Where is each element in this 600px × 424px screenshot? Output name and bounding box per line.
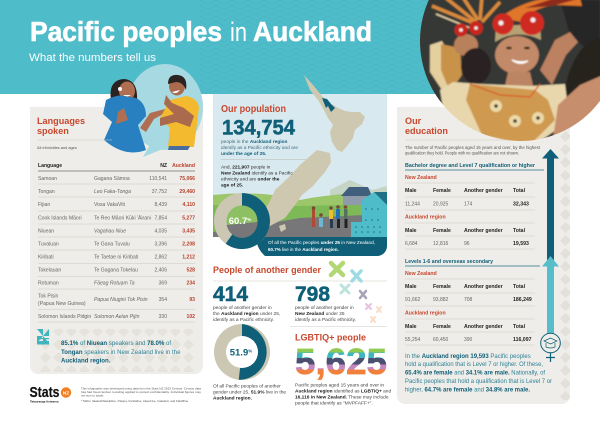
- section: Bachelor degree: 6,684: [405, 241, 418, 247]
- text: Auckland under 25: identify as a Pacific ethnicity and are: [221, 145, 298, 151]
- donut chart: 51.9%: [214, 324, 270, 380]
- summary text: higher, 64.7% are female and 34.8% are male.: [405, 388, 530, 394]
- callout pill: Of all the Pacific peoples under 25 in New Zealand,: [268, 240, 375, 245]
- donut chart: 51.9%: 51.9: [230, 348, 248, 358]
- stat: 414: 414: [213, 283, 248, 306]
- text: Auckland under 25: [221, 139, 298, 157]
- section: Bachelor degree: Total: [513, 228, 526, 234]
- table: languages: Niuean: [38, 228, 54, 234]
- table: languages: Te Gana Tuvalu: [94, 242, 130, 248]
- summary text: 65.4% are female and 34.1% are male. Nationally, of: [405, 370, 545, 376]
- table: languages: 369: [159, 280, 167, 286]
- table: languages: 4,110: [183, 202, 195, 208]
- section: Levels 1-6: 708: [464, 297, 473, 303]
- section: Levels 1-6: Another gender: [464, 324, 503, 330]
- section: Levels 1-6: Total: [513, 284, 526, 290]
- table: languages: Tokelauan: [38, 268, 61, 274]
- logo: Stats NZ: Stats: [30, 385, 60, 401]
- table: languages: Te Reo Māori Kūki 'Āirani: [94, 214, 151, 222]
- text: New Zealand under 25: New Zealand identify as a Pacific: [221, 170, 293, 176]
- section: Bachelor degree: [405, 163, 544, 249]
- section: Levels 1-6: Levels 1-6 and overseas secondary: [405, 259, 493, 265]
- section: Bachelor degree: 20,925: [433, 202, 449, 208]
- table: languages: 7,854: [154, 216, 167, 222]
- heading: Our: [405, 116, 422, 126]
- section: Levels 1-6: Female: [433, 324, 451, 330]
- footnote: * Māhū, fakaleitī/fakafefine, Palopa, Fa'afafine, Akava'ine, Fakaleitī, and Fafafifine.: [81, 399, 189, 403]
- section: Levels 1-6: Male: [405, 324, 417, 330]
- section: Bachelor degree: Female: [433, 188, 451, 194]
- section: Levels 1-6: 60,450: [433, 337, 449, 343]
- table: languages: 2,208: [182, 242, 195, 248]
- section: Levels 1-6: 390: [464, 337, 473, 343]
- title: Pacific peoples: [30, 16, 222, 47]
- table: languages: 2,862: [154, 254, 167, 260]
- section: Bachelor degree: 12,816: [433, 241, 449, 247]
- section: Levels 1-6: 55,254: [405, 337, 421, 343]
- summary text: Pacific peoples that hold a qualification that is Level 7 or: [405, 379, 552, 385]
- table: languages: 75,066: [179, 176, 195, 182]
- table: languages: 29,460: [179, 189, 195, 195]
- stat: 798: people of another gender in: [295, 305, 354, 311]
- summary text: hold a qualification that is Level 7 or higher. Of these,: [405, 362, 543, 368]
- section: Levels 1-6: Total: [513, 324, 526, 330]
- heading: spoken: [37, 126, 69, 136]
- section: Bachelor degree: New Zealand: [405, 175, 437, 181]
- subtitle: What the numbers tell us: [29, 52, 156, 64]
- stat: 798: [295, 283, 356, 323]
- heading: People of another gender: [213, 265, 321, 276]
- section: Levels 1-6: 116,097: [513, 337, 532, 343]
- stat: 414: people of another gender in: [213, 305, 272, 311]
- title: [30, 16, 372, 47]
- decorative flowers: [331, 263, 381, 322]
- footnote: This infographic was developed using data from the Stats NZ 2023 Census. Census data: [81, 386, 201, 390]
- heading: Our population: [221, 104, 286, 115]
- heading: LGBTIQ+: LGBTIQ+ people: [295, 332, 366, 344]
- section: Bachelor degree: 32,343: [513, 202, 529, 208]
- section: Bachelor degree: Another gender: [464, 228, 503, 234]
- stat: 798: New Zealand under 25: [295, 311, 345, 317]
- section: Bachelor degree: Another gender: [464, 188, 503, 194]
- logo: Stats NZ: Tatauranga Aotearoa: [30, 400, 59, 404]
- callout: Niuean and Tongan speakers: 85.1% of Niuean speakers and 78.0% of: [61, 340, 171, 347]
- heading: Languages: [37, 116, 85, 126]
- table: languages: 4,035: [154, 228, 167, 234]
- table: languages: Auckland: [172, 163, 195, 169]
- stat: 798: 798: [295, 283, 330, 306]
- section: Bachelor degree: Auckland region: [405, 214, 446, 220]
- table: languages: 330: [159, 314, 167, 320]
- intro text: The number of Pacific peoples aged 15 years and over, by the highest: [405, 145, 541, 150]
- section: Levels 1-6: [405, 259, 540, 345]
- donut chart: 60.7%: [214, 193, 270, 249]
- callout pill: [256, 237, 387, 256]
- table: languages: Language: [38, 163, 62, 169]
- panel: people of another gender: [213, 263, 391, 406]
- table: languages: Kiribati: [38, 254, 54, 260]
- table: languages: Fäeag Rotuạm Ta: [94, 280, 135, 286]
- arrow: dark teal: [542, 149, 559, 260]
- header band: [0, 0, 600, 94]
- table: languages: Solomon Islands Pidgin: [38, 314, 91, 320]
- section: Bachelor degree: 174: [464, 202, 473, 208]
- donut chart: 60.7%: 60.7: [229, 216, 247, 227]
- footnote: [81, 386, 202, 403]
- table: languages: Rotuman: [38, 280, 59, 286]
- table: languages: Te Taetae ni Kiribati: [94, 254, 138, 260]
- arrow: light teal: [542, 256, 559, 334]
- text: New Zealand under 25: age of 25.: [221, 182, 243, 188]
- text: New Zealand under 25: ethnicity and are under the: [221, 176, 280, 182]
- table: languages: 234: [186, 280, 195, 286]
- table: languages: Leo Faka-Tonga: [94, 189, 131, 195]
- table: languages: Gagana Sāmoa: [94, 176, 130, 182]
- section: Bachelor degree: Male: [405, 228, 417, 234]
- section: Bachelor degree: Female: [433, 228, 451, 234]
- table: languages: 102: [186, 314, 195, 320]
- section: Levels 1-6: New Zealand: [405, 271, 437, 277]
- panel: our population: [213, 75, 387, 256]
- section: Bachelor degree: Bachelor degree and Level 7 qualification or higher: [405, 163, 535, 169]
- text: LGBTIQ+: [295, 382, 391, 406]
- text: 51.9%: [213, 384, 286, 402]
- summary text: In the Auckland region 19,593 Pacific peoples: [405, 354, 531, 360]
- table: languages: 528: [186, 268, 195, 274]
- table: languages: Te Gagana Tokelau: [94, 268, 138, 274]
- text: Auckland under 25: under the age of 25.: [221, 151, 266, 157]
- donut chart: 60.7%: %: [247, 217, 251, 222]
- panel: our education: [397, 107, 570, 404]
- stat: 134,754: 134,754: [222, 116, 295, 140]
- text: LGBTIQ+: Pacific peoples aged 15 years and over in: [295, 382, 384, 388]
- table: languages: NZ: [160, 163, 167, 169]
- heading: education: [405, 126, 448, 136]
- stat: 414: identify as a Pacific ethnicity.: [213, 317, 274, 323]
- section: Bachelor degree: Male: [405, 188, 417, 194]
- callout: Niuean and Tongan speakers: Tongan speakers in New Zealand live in the: [61, 349, 181, 356]
- text: 51.9%: gender under 25, 51.9% live in the: [213, 390, 286, 396]
- callout: Niuean and Tongan speakers: Auckland region.: [61, 358, 111, 364]
- table: languages: Solomon Aelan Pijin: [94, 314, 140, 320]
- intro text: qualification they hold. People with no qualification are not shown.: [405, 150, 519, 156]
- stat: 798: identify as a Pacific ethnicity.: [295, 317, 356, 323]
- section: Bachelor degree: Total: [513, 188, 526, 194]
- table: languages: 8,439: [154, 202, 167, 208]
- text: LGBTIQ+: 16,116 in New Zealand. These may include: [295, 394, 389, 400]
- section: Levels 1-6: Male: [405, 284, 417, 290]
- section: Levels 1-6: Auckland region: [405, 310, 446, 316]
- illustration: two people talking: [103, 64, 203, 157]
- table: languages: Tuvaluan: [38, 242, 59, 248]
- table: languages: 3,396: [154, 242, 167, 248]
- icon: house: [341, 187, 372, 205]
- title: in: [230, 17, 247, 47]
- table: languages: Papua Niugini Tok Pisin: [94, 297, 148, 303]
- table: languages: Vagahau Niue: [94, 228, 126, 234]
- heading: [405, 116, 448, 136]
- section: Levels 1-6: 93,882: [433, 297, 449, 303]
- table: languages: Vosa VakaViti: [94, 202, 125, 208]
- table: languages: 37,752: [152, 189, 167, 195]
- text: New Zealand under 25: And, 221,907 people in: [221, 164, 271, 170]
- table: languages: 1,212: [182, 254, 195, 260]
- section: Bachelor degree: 19,593: [513, 241, 529, 247]
- title: Auckland: [253, 16, 372, 47]
- table: languages: 93: [189, 297, 195, 303]
- section: Levels 1-6: Female: [433, 284, 451, 290]
- callout: Niuean and Tongan speakers: [61, 340, 181, 364]
- section: Bachelor degree: 11,244: [405, 202, 420, 208]
- note: All ethnicities and ages: [37, 145, 77, 150]
- table: languages: 354: [159, 297, 167, 303]
- photo: Pacific dancers: [415, 0, 600, 150]
- illustration: group of people: [312, 205, 348, 228]
- stat: 414: [213, 283, 280, 323]
- stat: 5,625: 5,625: [295, 341, 387, 382]
- stat: 414: the Auckland region under 25,: [213, 311, 280, 317]
- table: languages: 5,277: [182, 216, 195, 222]
- heading: [37, 116, 85, 136]
- section: Bachelor degree: 96: [464, 241, 470, 247]
- callout pill: 60.7% live in the Auckland region.: [268, 247, 339, 252]
- table: languages: Tongan: [38, 189, 55, 195]
- callout pattern background: [38, 329, 195, 372]
- panel: languages spoken: [30, 64, 203, 374]
- intro text: [405, 145, 541, 156]
- map: New Zealand: [250, 75, 365, 232]
- table: languages: 110,541: [149, 176, 167, 182]
- section: Levels 1-6: 91,662: [405, 297, 421, 303]
- footnote: not sum to totals.: [81, 394, 104, 398]
- section: Levels 1-6: Another gender: [464, 284, 503, 290]
- text: LGBTIQ+: Auckland region identified as LGBTIQ+ and: [295, 388, 391, 394]
- text: Auckland under 25: people in the Auckland region: [221, 139, 287, 145]
- text: LGBTIQ+: people that identify as "MVPFAFF+".: [295, 400, 373, 406]
- table: languages: Fijian: [38, 202, 50, 208]
- table: languages: [38, 163, 195, 322]
- donut chart: 51.9%: %: [248, 348, 252, 354]
- table: languages: Tok Pisin: [38, 294, 59, 300]
- table: languages: (Papua New Guinea): [38, 301, 86, 307]
- table: languages: 3,435: [182, 228, 195, 234]
- icon: apartment building: [351, 192, 387, 237]
- logo: Stats NZ: NZ: [63, 390, 69, 396]
- text: 51.9%: Auckland region.: [213, 396, 252, 402]
- icon: graduate female symbol: [541, 333, 560, 362]
- summary text: [405, 354, 552, 394]
- icon: woven star: [37, 329, 49, 344]
- table: languages: 2,406: [154, 268, 167, 274]
- text: New Zealand under 25: [221, 164, 293, 188]
- footnote: has had fixed random rounding applied to protect confidentiality. Individual figures may: [81, 390, 202, 394]
- text: 51.9%: Of all Pacific peoples of another: [213, 384, 281, 390]
- table: languages: Cook Islands Māori: [38, 216, 82, 222]
- table: languages: Samoan: [38, 176, 57, 182]
- section: Levels 1-6: 186,249: [513, 297, 532, 303]
